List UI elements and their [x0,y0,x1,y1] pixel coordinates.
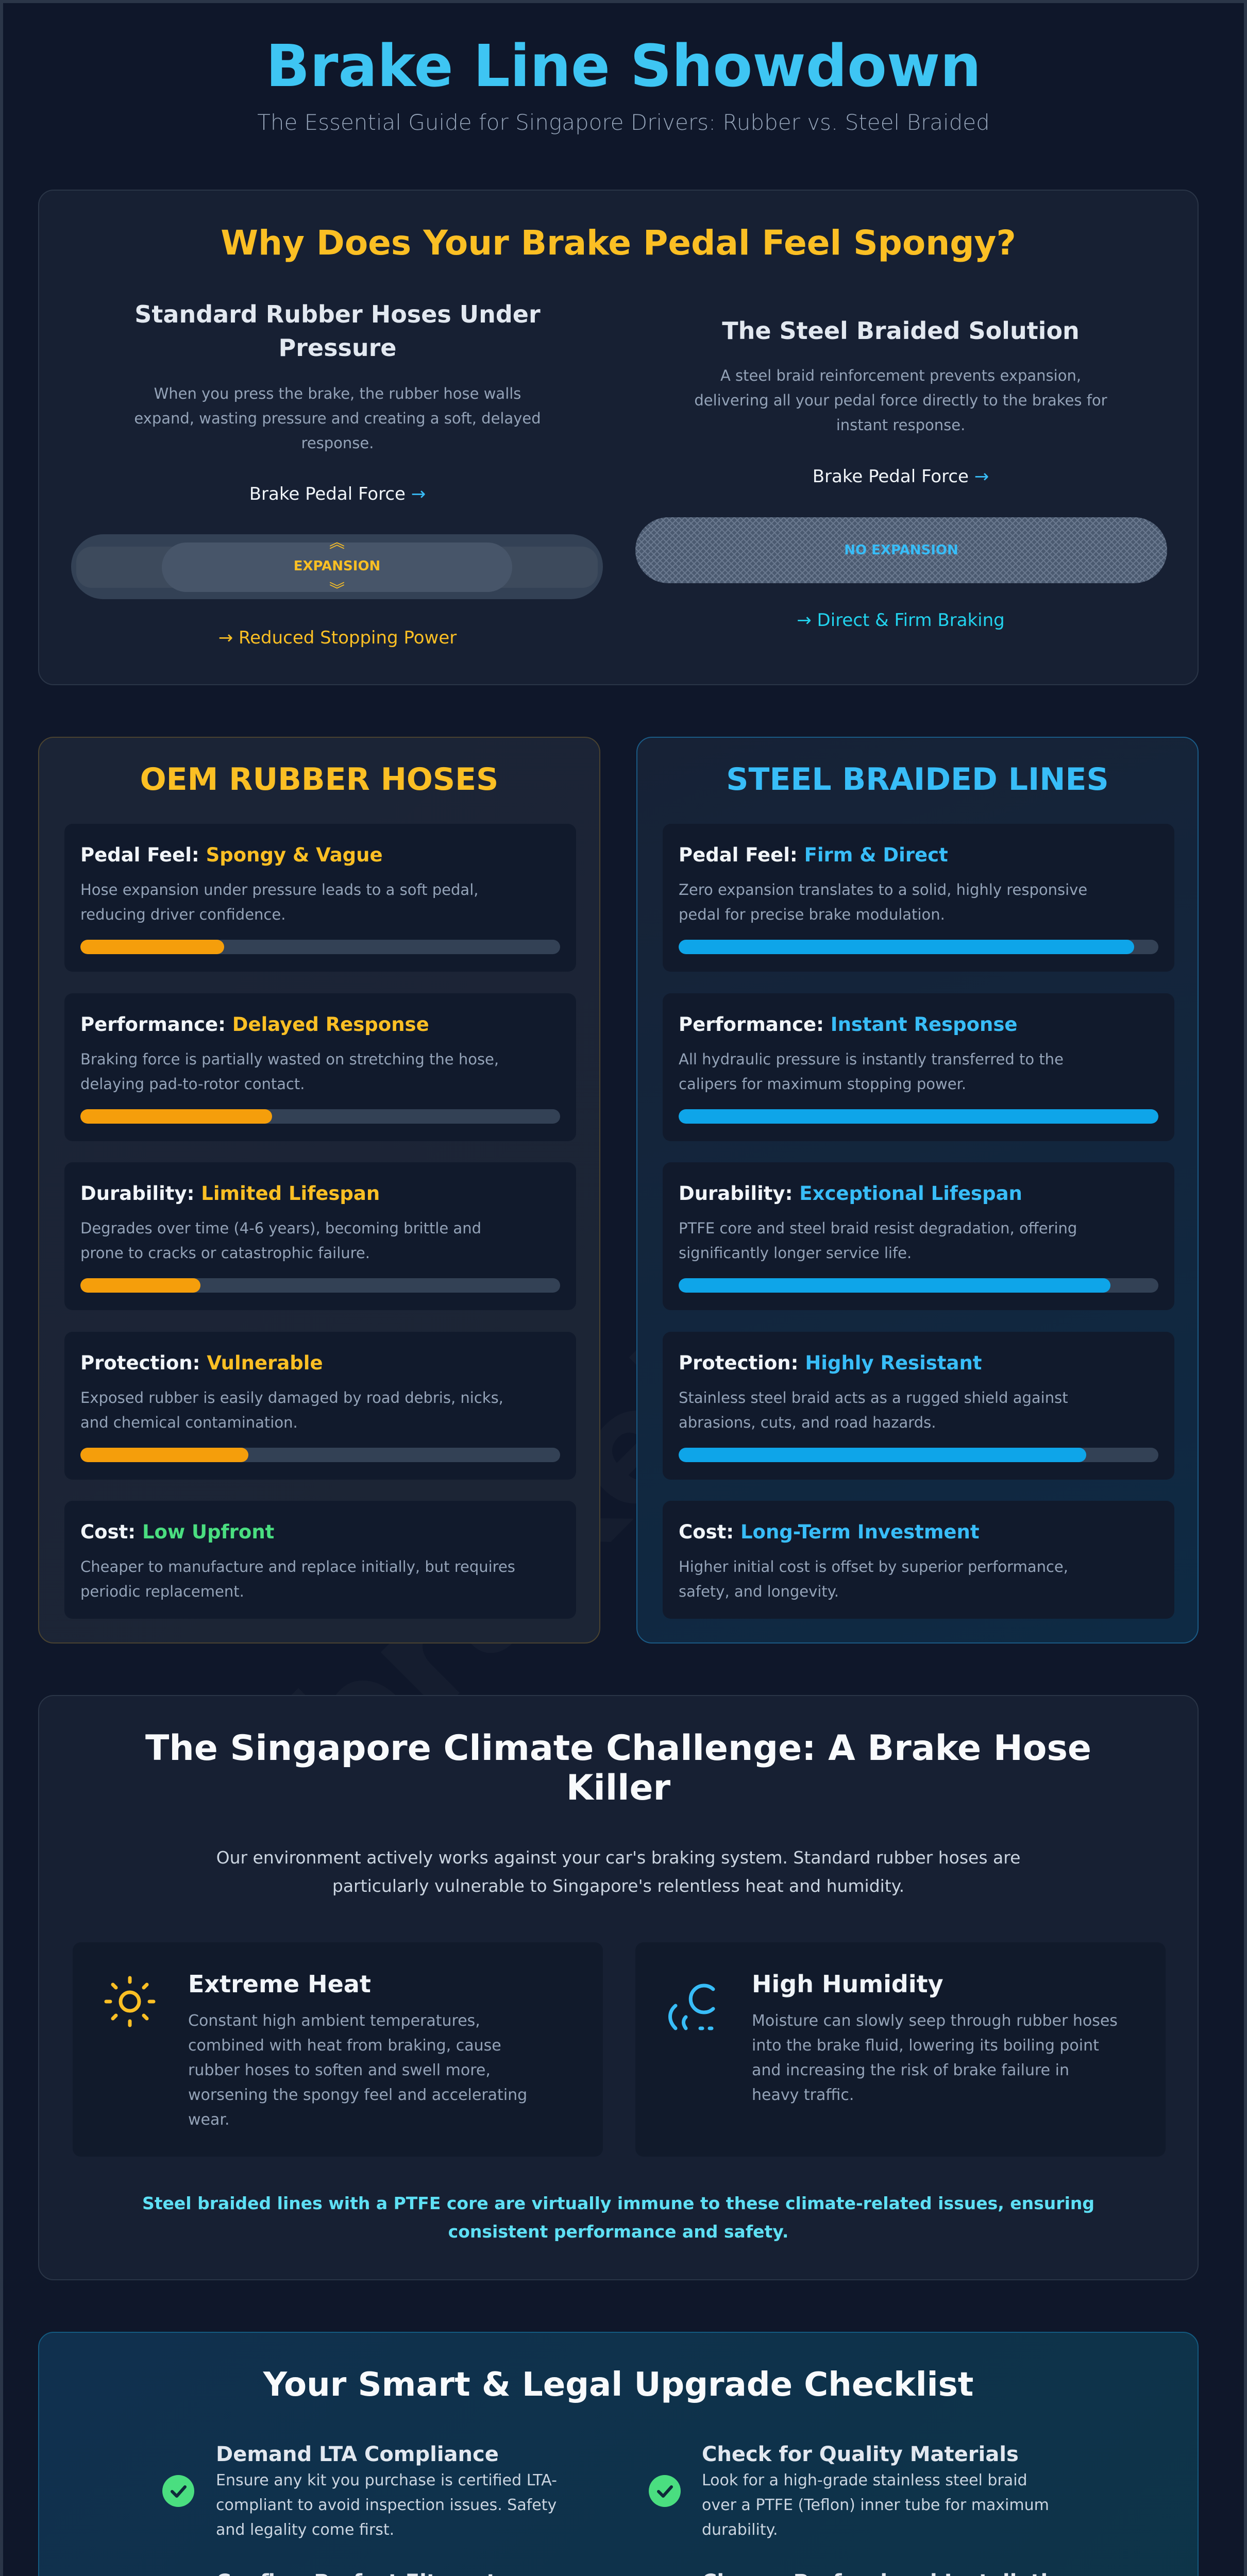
card: cost: Cost: Long-Term Investment [679,1521,980,1543]
text: rubber description: expand, wasting pressure and creating a soft, delayed [134,410,541,427]
diagram: expanding rubber hose: ︽ [329,534,345,552]
item: quality materials: Check for Quality Materials [702,2443,1019,2466]
card: performance [663,993,1174,1141]
card: pedal feel: pedal for precise brake modulation. [679,906,945,923]
item: quality materials: over a PTFE (Teflon) inner tube for maximum [702,2496,1049,2514]
panel: steel braided lines [636,737,1199,1643]
item: LTA compliance: compliant to avoid inspection issues. Safety [216,2496,557,2514]
card: durability: PTFE core and steel braid resist degradation, offering [679,1219,1077,1237]
panel: upgrade checklist [38,2332,1199,2576]
card: performance: calipers for maximum stopping power. [679,1075,966,1093]
item: LTA compliance: and legality come first. [216,2521,394,2539]
panel: why spongy [38,190,1199,685]
heading: checklist: Your Smart & Legal Upgrade Checklist [263,2366,973,2404]
card: performance: delaying pad-to-rotor contact. [80,1075,305,1093]
text: steel description: instant response. [836,416,965,434]
card: protection [64,1332,576,1480]
label: brake pedal force left: Brake Pedal Force → [249,484,426,504]
diagram: expanding rubber hose [71,534,603,599]
text: climate intro: particularly vulnerable to Singapore's relentless heat and humidity. [332,1876,904,1896]
card: pedal feel: Pedal Feel: Spongy & Vague [80,844,383,866]
card: cost: Cost: Low Upfront [80,1521,274,1543]
panel: OEM rubber hoses [38,737,600,1643]
title: high humidity: High Humidity [752,1970,943,1998]
text: heat description: worsening the spongy feel and accelerating [188,2086,527,2104]
item: LTA compliance: Ensure any kit you purchase is certified LTA- [216,2471,557,2489]
subheading: steel: The Steel Braided Solution [722,317,1080,345]
label: direct and firm braking: → Direct & Firm Braking [797,610,1005,631]
icon: check [649,2475,681,2507]
diagram: braided hose [635,517,1167,583]
item: LTA compliance [162,2443,557,2539]
icon: sun [104,1976,156,2027]
text: heat description: wear. [188,2111,230,2129]
subheading: rubber: Standard Rubber Hoses Under [134,300,541,328]
text: heat description: rubber hoses to soften and swell more, [188,2061,491,2079]
card: durability: Durability: Limited Lifespan [80,1182,380,1205]
card: cost [663,1501,1174,1619]
item: quality materials: Look for a high-grade stainless steel braid [702,2471,1027,2489]
card: protection: abrasions, cuts, and road hazards. [679,1414,936,1431]
card: pedal feel: Pedal Feel: Firm & Direct [679,844,948,866]
card: protection: Stainless steel braid acts as a rugged shield against [679,1389,1068,1406]
heading: climate challenge: Killer [566,1768,670,1808]
card: protection [663,1332,1174,1480]
diagram: expanding rubber hose: EXPANSION [294,558,380,574]
card: pedal feel: Hose expansion under pressure leads to a soft pedal, [80,881,478,899]
callout: PTFE immunity: consistent performance and safety. [448,2222,788,2242]
card: performance: Performance: Delayed Response [80,1013,429,1036]
text: steel description: delivering all your pedal force directly to the brakes for [694,392,1107,409]
heading: climate challenge [145,1728,1091,1808]
subheading: rubber [134,300,541,362]
card: pedal feel [64,824,576,972]
text: humidity description: into the brake fluid, lowering its boiling point [752,2037,1099,2055]
card: durability: Degrades over time (4-6 years), becoming brittle and [80,1219,481,1237]
title: extreme heat: Extreme Heat [188,1970,371,1998]
subtitle: The Essential Guide for Singapore Drivers: Rubber vs. Steel Braided [257,110,990,135]
card: high humidity [635,1942,1166,2157]
card: performance: All hydraulic pressure is instantly transferred to the [679,1050,1064,1068]
title: Brake Line Showdown [266,33,981,100]
text: rubber description: response. [301,434,374,452]
card: cost: Higher initial cost is offset by superior performance, [679,1558,1068,1575]
card: pedal feel: reducing driver confidence. [80,906,285,923]
heading: climate challenge: The Singapore Climate Challenge: A Brake Hose [145,1728,1091,1769]
text: heat description [188,2012,527,2129]
card: durability: significantly longer service life. [679,1244,912,1262]
diagram: expanding rubber hose: ︾ [329,581,345,599]
label: brake pedal force right: Brake Pedal Force → [813,466,989,487]
heading: OEM rubber hoses: OEM RUBBER HOSES [140,761,498,798]
text: climate intro [216,1848,1020,1896]
callout: PTFE immunity [142,2193,1094,2242]
item: quality materials: durability. [702,2521,778,2539]
item: LTA compliance: Demand LTA Compliance [216,2443,499,2466]
card: protection: Exposed rubber is easily damaged by road debris, nicks, [80,1389,503,1406]
text: humidity description [752,2012,1118,2104]
card: durability: Durability: Exceptional Lifespan [679,1182,1022,1205]
text: humidity description: heavy traffic. [752,2086,854,2104]
card: durability [64,1162,576,1310]
card: cost: Cheaper to manufacture and replace initially, but requires [80,1558,515,1575]
watermark: brakeline.sg [252,937,1140,1825]
card: protection: Protection: Vulnerable [80,1352,323,1374]
card: protection: Protection: Highly Resistant [679,1352,982,1374]
text: heat description: Constant high ambient temperatures, [188,2012,480,2030]
card: pedal feel: Zero expansion translates to a solid, highly responsive [679,881,1087,899]
card: pedal feel [663,824,1174,972]
heading: steel braided lines: STEEL BRAIDED LINES [726,761,1109,798]
icon: check [162,2475,194,2507]
card: extreme heat [73,1942,603,2157]
diagram: braided hose: NO EXPANSION [844,543,958,558]
icon: humidity [668,1984,715,2030]
panel: climate challenge [38,1695,1199,2280]
text: climate intro: Our environment actively works against your car's braking system. Standard rubber hoses are [216,1848,1020,1868]
subheading: rubber: Pressure [278,334,397,362]
text: steel description: A steel braid reinforcement prevents expansion, [720,367,1081,384]
label: reduced stopping power: → Reduced Stopping Power [218,628,457,648]
card: performance [64,993,576,1141]
card: cost [64,1501,576,1619]
card: performance: Performance: Instant Response [679,1013,1017,1036]
text: steel description [694,367,1107,434]
text: rubber description [134,385,541,452]
text: rubber description: When you press the brake, the rubber hose walls [154,385,521,402]
card: performance: Braking force is partially wasted on stretching the hose, [80,1050,499,1068]
text: heat description: combined with heat from braking, cause [188,2037,501,2055]
card: durability: prone to cracks or catastrophic failure. [80,1244,370,1262]
heading: why spongy: Why Does Your Brake Pedal Feel Spongy? [221,223,1016,263]
card: protection: and chemical contamination. [80,1414,298,1431]
card: cost: periodic replacement. [80,1583,244,1600]
text: humidity description: and increasing the risk of brake failure in [752,2061,1069,2079]
text: humidity description: Moisture can slowly seep through rubber hoses [752,2012,1118,2030]
card: cost: safety, and longevity. [679,1583,839,1600]
card: durability [663,1162,1174,1310]
item: quality materials [649,2443,1049,2539]
callout: PTFE immunity: Steel braided lines with a PTFE core are virtually immune to these climate-related issues, ensuring [142,2193,1094,2213]
